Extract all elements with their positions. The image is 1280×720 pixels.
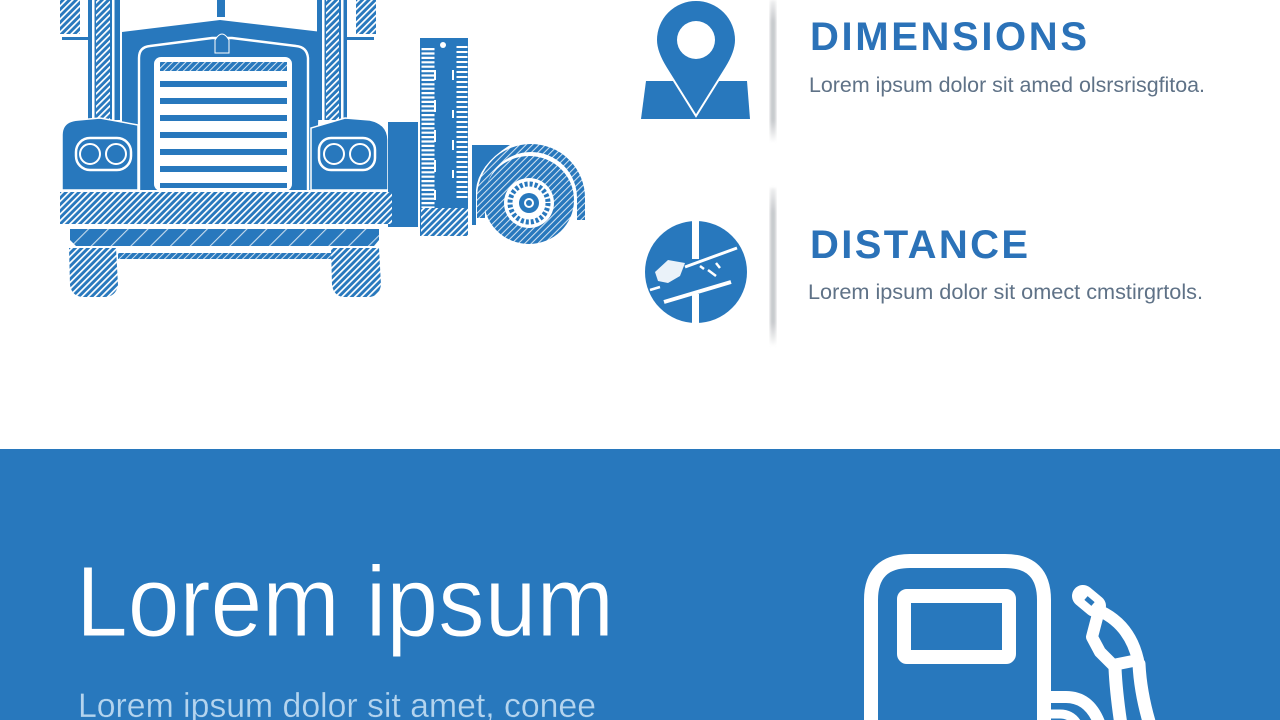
illustration: truck front with ruler and wheel [60,0,581,297]
heading: lorem ipsum: Lorem ipsum [76,546,614,658]
trailer arm [472,145,510,225]
hood ornament [215,34,229,53]
hood and cab [122,20,322,190]
panel: fuel band [0,449,1280,720]
lower bumper [70,229,379,246]
icon: road circle [645,219,747,325]
left fender and headlights [62,118,138,190]
heading: distance: DISTANCE [810,223,1028,267]
description: distance: Lorem ipsum dolor sit omect cmstirgrtols. [808,281,1203,304]
heading: dimensions: DIMENSIONS [810,15,1087,59]
ruler [420,38,468,236]
right fender and headlights [311,118,388,190]
icon: map pin [641,0,750,119]
divider [770,0,776,142]
divider [770,188,776,346]
bracket to ruler [388,122,418,227]
front tyres [69,248,381,297]
grille frame [139,38,308,190]
axle bar [118,253,332,259]
feature: dimensions [641,0,1205,142]
side wheel [481,148,581,244]
grille slats [154,57,292,191]
description: dimensions: Lorem ipsum dolor sit amed olsrsrisgfitoa. [809,74,1205,97]
truck mirrors [60,0,376,40]
feature: distance [645,188,1203,346]
band background [0,449,1280,720]
bumper [60,192,392,224]
antenna [217,0,225,17]
icon: fuel pump [871,561,1150,720]
exhaust stacks [88,0,347,120]
